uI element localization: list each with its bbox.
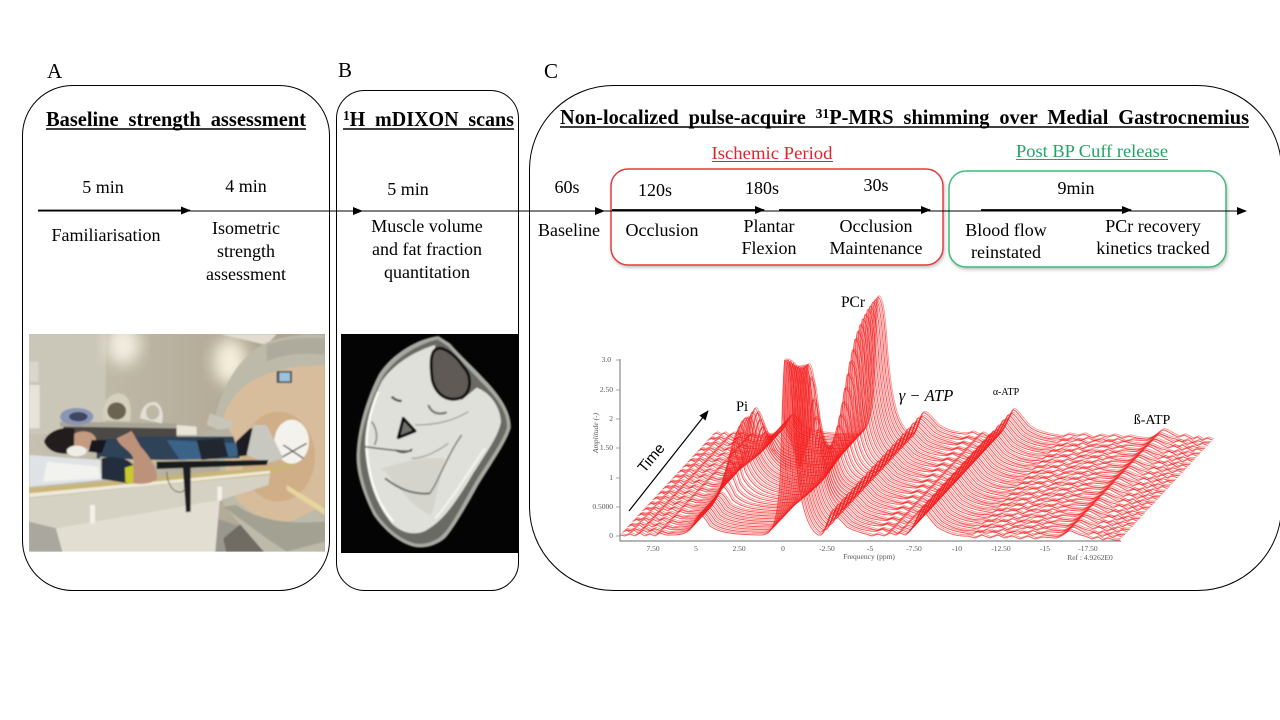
axes: 0.5000 bbox=[592, 502, 613, 511]
axes: 1 bbox=[609, 473, 613, 482]
timeline labels: section A: assessment bbox=[206, 264, 286, 284]
timeline labels: section A: Isometric bbox=[212, 218, 280, 238]
timeline labels: section B bbox=[371, 179, 483, 282]
axes bbox=[591, 355, 1121, 562]
heading C bbox=[560, 105, 1249, 129]
heading B: 1 bbox=[343, 109, 350, 124]
timeline labels: section A: strength bbox=[217, 241, 275, 261]
magnet outer bbox=[215, 334, 325, 555]
panel C: 31P-MRS protocol bbox=[530, 59, 1280, 590]
heading C: P-MRS shimming over Medial Gastrocnemius bbox=[829, 105, 1249, 129]
timeline labels: section A: Familiarisation bbox=[52, 225, 160, 245]
axes: Ref : 4.9262E0 bbox=[1067, 553, 1113, 562]
peak label Pi: Pi bbox=[736, 399, 748, 415]
timeline labels: section B: quantitation bbox=[384, 262, 470, 282]
time arrow: Time bbox=[635, 440, 669, 476]
timeline labels: section C: 30s bbox=[863, 175, 889, 195]
peak label gamma-ATP: γ − ATP bbox=[899, 386, 953, 405]
spectra traces bbox=[620, 296, 1214, 540]
body bbox=[97, 437, 240, 460]
timeline labels: section C: PCr recovery bbox=[1105, 216, 1201, 236]
timeline labels: section C: Plantar bbox=[744, 216, 794, 236]
timeline labels: section B: and fat fraction bbox=[372, 239, 482, 259]
timeline labels: section C: Occlusion bbox=[840, 216, 912, 236]
ischemic period box: Ischemic Period bbox=[712, 143, 832, 163]
letter A: A bbox=[47, 59, 63, 83]
letter C: C bbox=[544, 59, 558, 83]
peak label PCr: PCr bbox=[841, 294, 866, 311]
panel A: baseline strength assessment bbox=[20, 59, 340, 590]
post cuff release box bbox=[949, 141, 1226, 267]
photo: participant on MRI scanner table bbox=[29, 334, 325, 552]
waterfall spectrum bbox=[591, 294, 1214, 562]
axes: Amplitude (-) bbox=[591, 412, 600, 454]
timeline labels: section C: kinetics tracked bbox=[1096, 238, 1210, 258]
pillow bbox=[29, 455, 102, 487]
axes: 5 bbox=[694, 544, 698, 553]
timeline labels: section C: 60s bbox=[554, 177, 580, 197]
time arrow bbox=[629, 411, 708, 511]
timeline labels: section C: reinstated bbox=[971, 242, 1041, 262]
timeline labels: section C: Flexion bbox=[741, 238, 797, 258]
post cuff release box: Post BP Cuff release bbox=[1016, 141, 1168, 161]
heading B: H mDIXON scans bbox=[350, 107, 514, 131]
axes: 3.0 bbox=[602, 355, 611, 364]
axes: 0 bbox=[609, 531, 613, 540]
axes: 0 bbox=[781, 544, 785, 553]
axes: -10 bbox=[952, 544, 962, 553]
axes: -12.50 bbox=[991, 544, 1011, 553]
heading C: Non-localized pulse-acquire bbox=[560, 105, 814, 129]
axes: -5 bbox=[867, 544, 873, 553]
heading C: 31 bbox=[816, 107, 829, 122]
peak label alpha-ATP: α-ATP bbox=[993, 387, 1020, 398]
timeline labels: section C: Occlusion bbox=[626, 220, 698, 240]
shelf + coils bbox=[63, 425, 177, 440]
timeline labels: section A bbox=[52, 176, 286, 284]
axes: -15 bbox=[1040, 544, 1050, 553]
timeline labels: section C: Maintenance bbox=[830, 238, 922, 258]
floor bbox=[29, 522, 62, 552]
timeline labels: section C: Baseline bbox=[538, 220, 600, 240]
panel B: mDIXON scans bbox=[335, 58, 525, 590]
timeline labels: section A: 4 min bbox=[225, 176, 267, 196]
timeline labels: section C bbox=[538, 175, 1210, 262]
axes: 2.50 bbox=[600, 385, 613, 394]
axes: 7.50 bbox=[646, 544, 660, 553]
heading A: Baseline strength assessment bbox=[46, 107, 306, 131]
table base bbox=[56, 500, 220, 552]
ischemic period box bbox=[611, 143, 943, 265]
axes: -7.50 bbox=[906, 544, 922, 553]
timeline labels: section C: Blood flow bbox=[965, 220, 1047, 240]
timeline labels: section A: 5 min bbox=[82, 177, 124, 197]
MRI image: lower-leg cross section bbox=[341, 334, 518, 553]
timeline labels: section C: 9min bbox=[1057, 178, 1095, 198]
timeline arrows bbox=[38, 210, 1246, 211]
axes: Frequency (ppm) bbox=[843, 552, 895, 561]
head bbox=[71, 431, 96, 449]
axes: 2.50 bbox=[732, 544, 746, 553]
axes: 2 bbox=[609, 414, 613, 423]
peak label beta-ATP: ß-ATP bbox=[1134, 413, 1170, 428]
axes: -17.50 bbox=[1078, 544, 1098, 553]
letter B: B bbox=[338, 58, 352, 82]
timeline labels: section B: Muscle volume bbox=[371, 216, 483, 236]
axes: 1.50 bbox=[600, 443, 613, 452]
axes: -2.50 bbox=[819, 544, 835, 553]
timeline labels: section C: 180s bbox=[745, 178, 779, 198]
timeline labels: section C: 120s bbox=[638, 180, 672, 200]
timeline labels: section B: 5 min bbox=[387, 179, 429, 199]
